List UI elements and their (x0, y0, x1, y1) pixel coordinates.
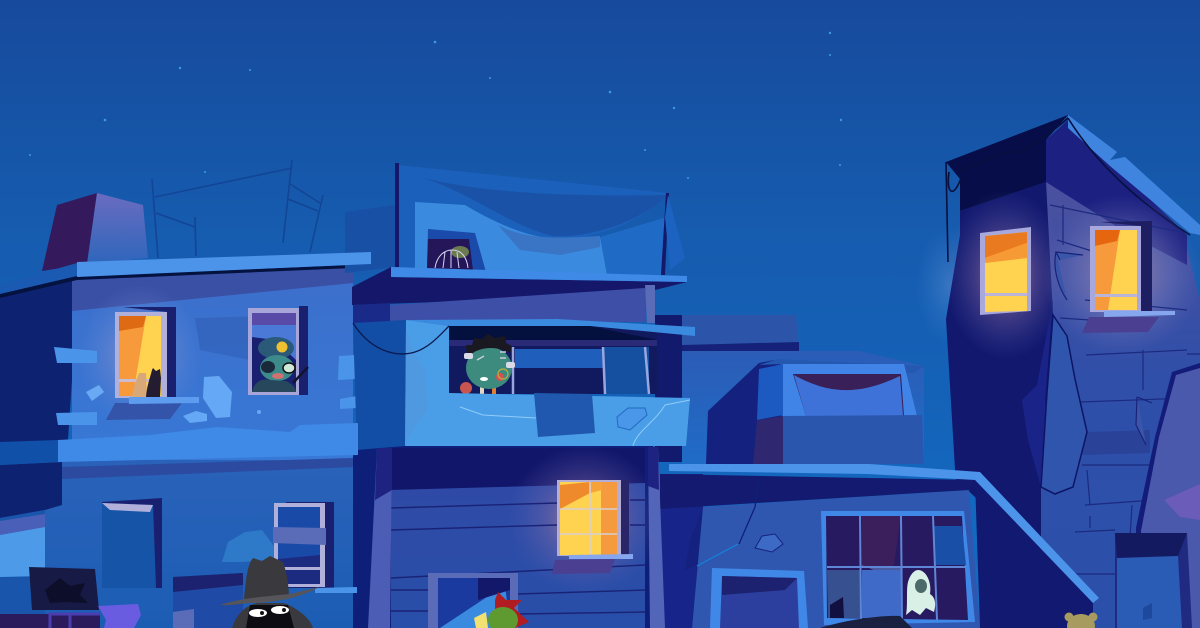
right column top shade (648, 447, 659, 490)
tower: shadow under roof on right wall (1046, 120, 1187, 265)
low annex light band (0, 527, 45, 577)
ledge (58, 423, 358, 462)
small house dark side (706, 359, 783, 464)
under balcony shadow (390, 448, 645, 490)
tower: wall cracks (1055, 252, 1152, 445)
lit window (106, 307, 199, 420)
wall stone (222, 530, 274, 562)
loose stone (755, 534, 783, 552)
left building front overlaps (58, 252, 371, 628)
tower: dark patch (1082, 430, 1150, 455)
balcony interior (449, 326, 657, 394)
tower: hanging wire (946, 118, 1190, 262)
small house blue side (757, 364, 783, 420)
stars (29, 32, 842, 179)
interior purple strip (449, 340, 657, 346)
purple chair (98, 604, 141, 628)
tower: eave underside (946, 115, 1068, 211)
left upper band (353, 303, 390, 323)
tower: right wall (1041, 182, 1200, 628)
tower: stone buttress (1041, 315, 1087, 494)
pillar (645, 285, 655, 323)
roof slab (391, 267, 687, 282)
left building (0, 160, 357, 628)
window glow (78, 285, 202, 425)
small house window frame (783, 364, 917, 416)
roof shadow line (0, 265, 353, 298)
left shadow wall (660, 474, 703, 628)
broken monitor (29, 567, 99, 610)
tower building (915, 115, 1200, 628)
rooftop left side (395, 202, 415, 267)
back block (345, 205, 395, 273)
tower: right rock pillar (1136, 363, 1200, 628)
wall bricks and rubble (54, 347, 357, 425)
roof slab (77, 252, 371, 277)
tower: window glow right (1042, 195, 1200, 355)
ghost figure (906, 570, 935, 615)
blanket (534, 393, 595, 437)
small house window interior (793, 374, 904, 416)
middle building (345, 163, 695, 628)
officer character (252, 337, 308, 392)
wall (692, 490, 980, 628)
crack glow (697, 544, 738, 566)
tower: left lit window (980, 227, 1031, 315)
lit plank window (552, 480, 633, 574)
roof underside (352, 267, 687, 305)
left column top shade (375, 448, 392, 500)
rooftop wall dark patch (498, 225, 600, 255)
small house tarp (794, 375, 903, 416)
lower right boarded window (273, 502, 334, 588)
door (173, 573, 243, 628)
police officer window (248, 306, 308, 395)
rooftop wall right (600, 217, 667, 275)
back block shadow (655, 315, 682, 462)
roof slab (669, 464, 1099, 603)
desk (0, 614, 100, 628)
upper wall top shadow (72, 268, 353, 311)
wall patches (195, 315, 300, 362)
tower: stone buttress shadow (1022, 300, 1055, 494)
cracks (697, 480, 759, 566)
black cat (146, 368, 161, 397)
tarp back sheet (398, 165, 668, 275)
plank door (428, 573, 518, 628)
back block bottom strip (682, 342, 799, 351)
goblin character (474, 592, 529, 628)
right column (648, 447, 665, 628)
upper left dark side (0, 277, 72, 445)
plank wall (391, 483, 645, 628)
balcony shade (405, 330, 428, 442)
chimney (42, 193, 148, 271)
tower: roof edge (1068, 115, 1200, 235)
tower: window glow left (944, 190, 1068, 360)
side wall below (353, 446, 653, 628)
lower left boarded window (102, 498, 162, 588)
tarp sag band (420, 177, 668, 236)
desk top frame (50, 614, 100, 628)
back block (682, 315, 799, 350)
frankenstein character (460, 334, 515, 394)
interior shutter (515, 349, 603, 368)
interior window frame (513, 347, 649, 394)
balcony stone (617, 408, 647, 430)
small house roof (759, 359, 924, 373)
cart silhouette (820, 616, 912, 628)
back block and small rooftop house (655, 315, 924, 464)
roof left (0, 263, 77, 295)
upper wall band (390, 288, 645, 322)
pale cat (132, 373, 147, 397)
small house lower block (783, 415, 924, 464)
tarp pole left (395, 163, 399, 267)
small house maroon side (753, 416, 783, 464)
antennas (152, 160, 323, 258)
tower: left dark face (946, 182, 1053, 560)
top shadow (660, 474, 975, 509)
balcony wall (405, 320, 690, 446)
lower wall top shadow (62, 458, 353, 479)
rear wall (682, 351, 924, 464)
tower: doorway (1115, 533, 1192, 628)
rooftop small window (427, 229, 486, 272)
wall blob (660, 507, 703, 628)
door (710, 568, 808, 628)
balcony left side (353, 320, 406, 450)
lower right house (660, 464, 1099, 628)
lower sill (315, 587, 357, 593)
tower: glow on the sky (915, 225, 985, 345)
cable (353, 323, 449, 354)
big broken window (821, 511, 975, 625)
tower: brick lines (1050, 205, 1200, 574)
plank lines (391, 500, 645, 614)
right dark side (975, 480, 1093, 628)
spy character (220, 556, 319, 628)
interior top shadow (449, 326, 657, 340)
low annex wall (0, 510, 45, 628)
tower: right lit window (1082, 221, 1175, 333)
ledge left (0, 440, 58, 465)
balcony top slab (406, 319, 695, 336)
tarp hanging end (665, 195, 685, 270)
upper wall (72, 267, 353, 462)
balcony cracks (460, 400, 690, 446)
interior glass (604, 347, 649, 394)
window glow (507, 445, 663, 595)
teddy bear (1064, 612, 1098, 628)
lower left dark side (0, 462, 62, 518)
lower wall (45, 460, 353, 628)
low annex purple band (0, 514, 45, 535)
left column (368, 448, 392, 628)
tarp pole right (661, 193, 669, 275)
rooftop wall (415, 202, 607, 275)
